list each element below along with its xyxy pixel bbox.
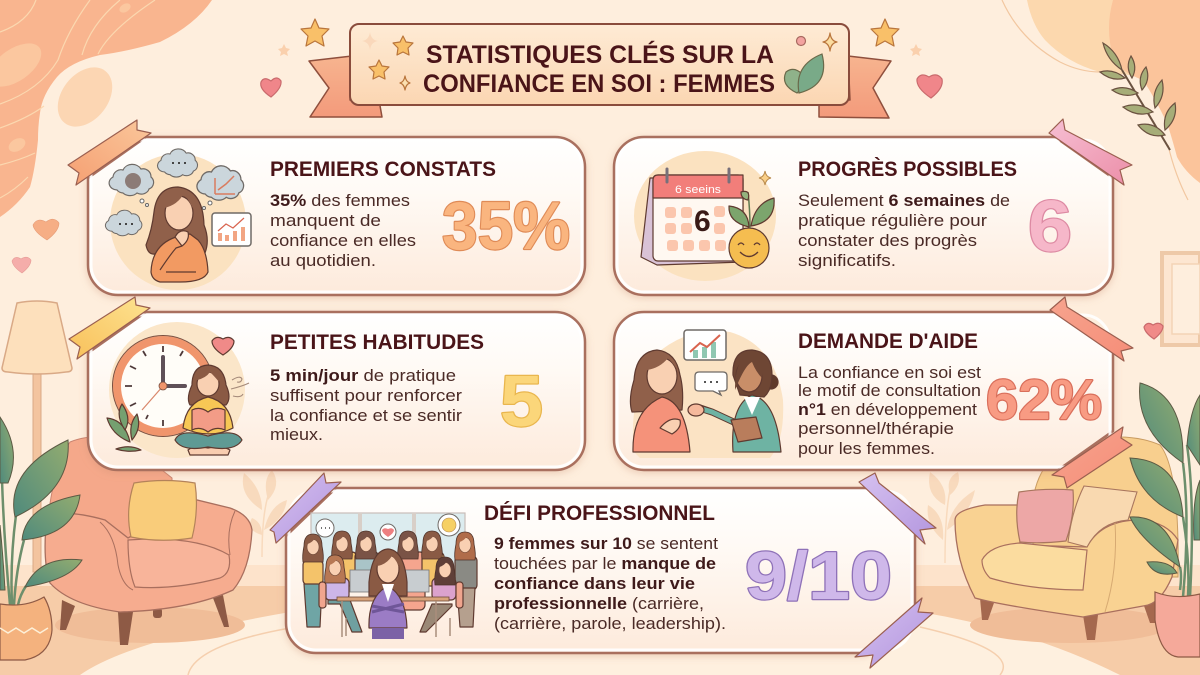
right plant (1130, 383, 1200, 657)
central woman (369, 549, 407, 596)
banner ribbon right (819, 56, 891, 118)
panel: demande d'aide (614, 297, 1133, 488)
beige cushion (1068, 486, 1137, 547)
speech bubbles (316, 519, 334, 537)
banner plate (350, 24, 849, 105)
stat number: 6 (1028, 187, 1072, 267)
pink cushion (1017, 489, 1073, 543)
icon: calendar and smiling seedling (634, 151, 776, 281)
leaf icon (784, 54, 824, 93)
stat number: 35% (442, 188, 570, 264)
stat number: 62% (986, 368, 1102, 432)
decorative ellipse top left (47, 57, 123, 137)
description (798, 191, 1010, 270)
icon: calendar and smiling seedling: 6 (694, 205, 711, 238)
description: 35% des femmes (270, 191, 410, 210)
description: n°1 en développement (798, 400, 977, 419)
description: suffisent pour renforcer (270, 386, 462, 405)
monitors (350, 570, 372, 592)
heading: PROGRÈS POSSIBLES (798, 158, 1017, 181)
description: personnel/thérapie (798, 419, 954, 438)
title banner (309, 24, 891, 118)
description: 5 min/jour de pratique (270, 366, 456, 385)
ribbon top left (270, 473, 341, 543)
desk (337, 597, 449, 601)
ribbon lower right (1052, 427, 1132, 488)
description: constater des progrès (798, 231, 977, 250)
description: mieux. (270, 425, 323, 444)
description: significatifs. (798, 251, 896, 270)
description: la confiance et se sentir (270, 406, 462, 425)
ribbon (68, 120, 151, 185)
description: Seulement 6 semaines de (798, 191, 1010, 210)
standing colleagues (303, 552, 477, 627)
description: La confiance en soi est (798, 363, 981, 382)
panel: défi professionnel (270, 473, 936, 668)
description: 9 femmes sur 10 se sentent (494, 534, 718, 553)
icon: woman talking to therapist (630, 330, 783, 458)
left plant pot (0, 597, 52, 660)
panel: premiers constats (68, 120, 585, 295)
description (270, 366, 462, 444)
wall sprigs (243, 470, 975, 563)
decorative blob top left (0, 0, 212, 217)
description: pratique régulière pour (798, 211, 987, 230)
description (494, 534, 726, 633)
ribbon top right (1050, 297, 1133, 361)
description: confiance dans leur vie (494, 574, 695, 593)
title banner: CONFIANCE EN SOI : FEMMES (423, 70, 775, 98)
ribbon (69, 297, 150, 359)
floor and rug (0, 586, 1200, 675)
description: touchées par le manque de (494, 554, 716, 573)
description: le motif de consultation (798, 381, 981, 400)
heading: DEMANDE D'AIDE (798, 330, 978, 353)
description (798, 363, 981, 458)
stat number: 9/10 (745, 538, 892, 614)
wall panel band (0, 565, 1200, 586)
floor lamp (2, 301, 72, 572)
description: professionnelle (carrière, (494, 594, 704, 613)
ribbon top right (859, 473, 936, 544)
description: pour les femmes. (798, 439, 935, 458)
heading: PETITES HABITUDES (270, 331, 484, 354)
decorative blob top right (1002, 0, 1200, 200)
description: (carrière, parole, leadership). (494, 614, 726, 633)
branch top right (1100, 43, 1176, 150)
right armchair (955, 437, 1178, 643)
description: manquent de (270, 211, 381, 230)
icon: calendar and smiling seedling: 6 seeins (675, 184, 722, 196)
title text: STATISTIQUES CLÉS SUR LA (426, 40, 774, 69)
description (270, 191, 416, 270)
ribbon bottom right (855, 598, 933, 668)
left plant (0, 417, 82, 660)
stars and hearts around title (12, 19, 1163, 339)
icon: office team of women (303, 513, 477, 639)
picture frame (1162, 253, 1200, 345)
heading: PREMIERS CONSTATS (270, 158, 496, 181)
panel: progrès possibles (614, 119, 1132, 295)
left armchair (45, 436, 252, 645)
right plant pot (1155, 592, 1200, 657)
description: au quotidien. (270, 251, 376, 270)
description: confiance en elles (270, 231, 416, 250)
stat number: 5 (500, 362, 543, 442)
cushion (129, 480, 196, 540)
panel: petites habitudes (69, 297, 585, 470)
heading: DÉFI PROFESSIONNEL (484, 502, 715, 525)
banner ribbon left (309, 56, 382, 117)
seated colleagues (319, 578, 463, 632)
icon: thoughtful woman with clouds (105, 149, 251, 290)
ribbon (1049, 119, 1132, 185)
icon: clock and reading woman (107, 322, 249, 458)
